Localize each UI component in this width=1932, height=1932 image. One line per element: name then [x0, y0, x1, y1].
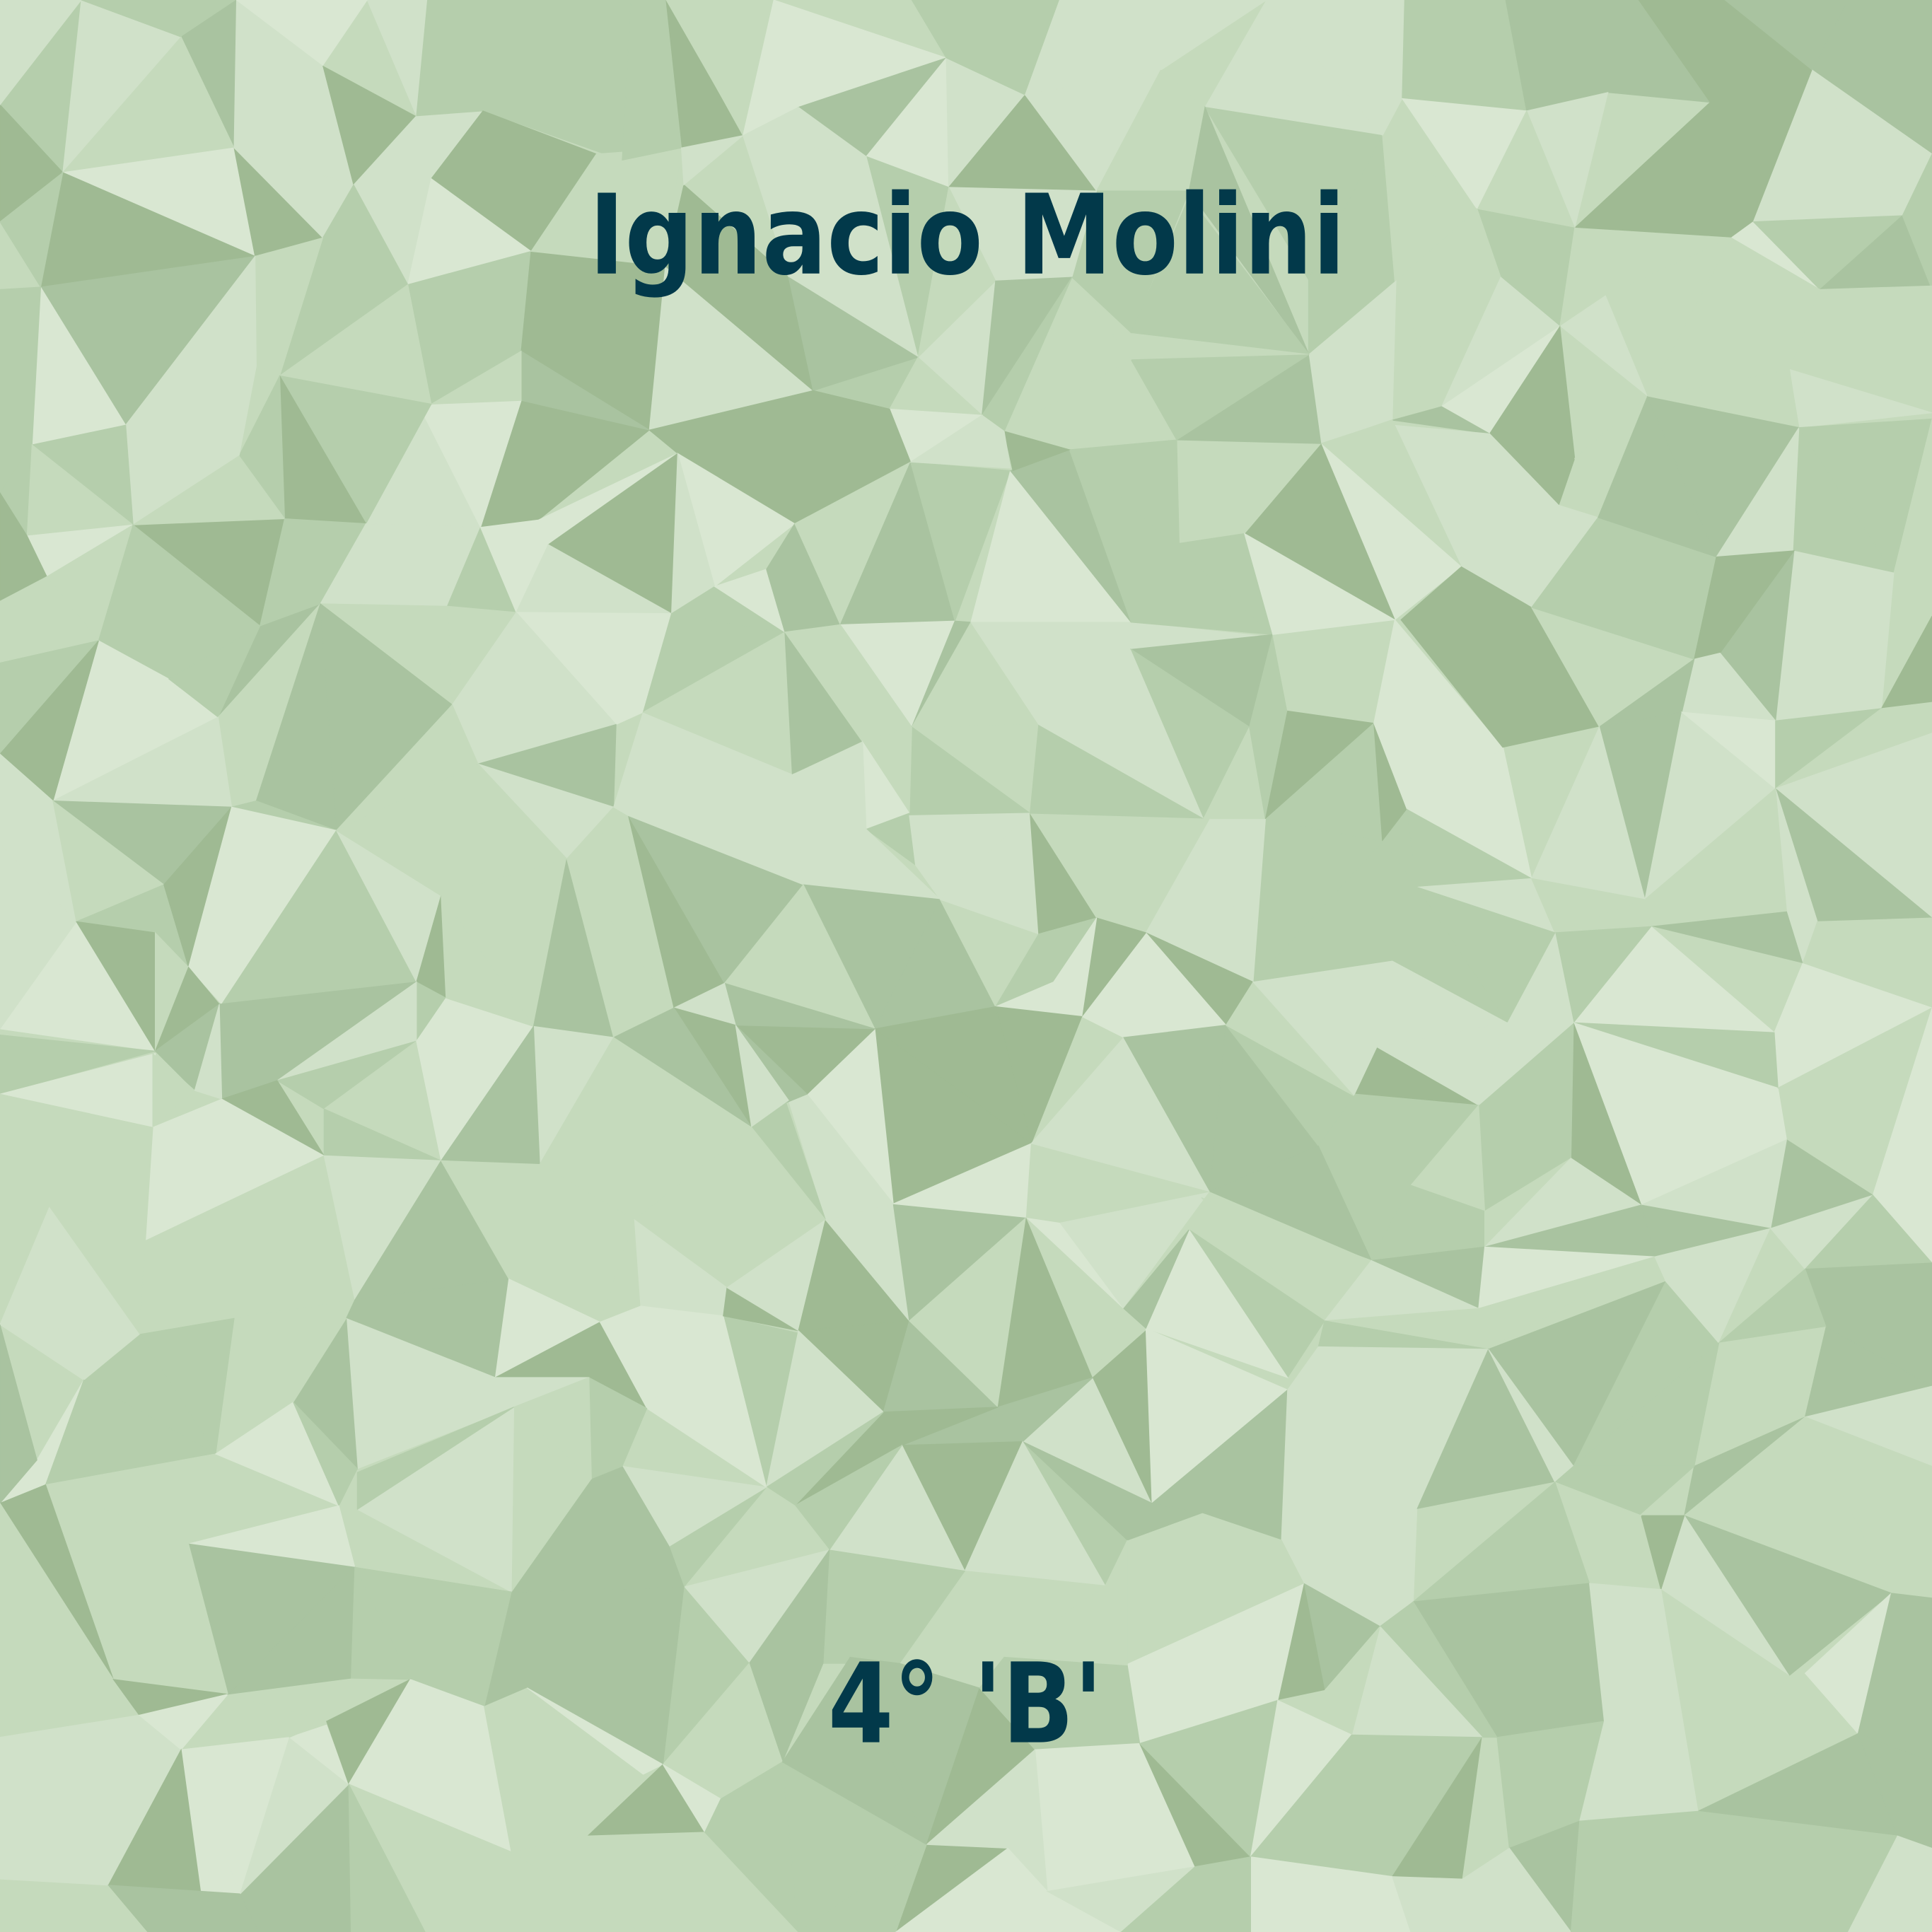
subtitle: class grade: 4° 'B'	[828, 1639, 1102, 1769]
title: student name: Ignacio Molini	[589, 170, 1346, 300]
